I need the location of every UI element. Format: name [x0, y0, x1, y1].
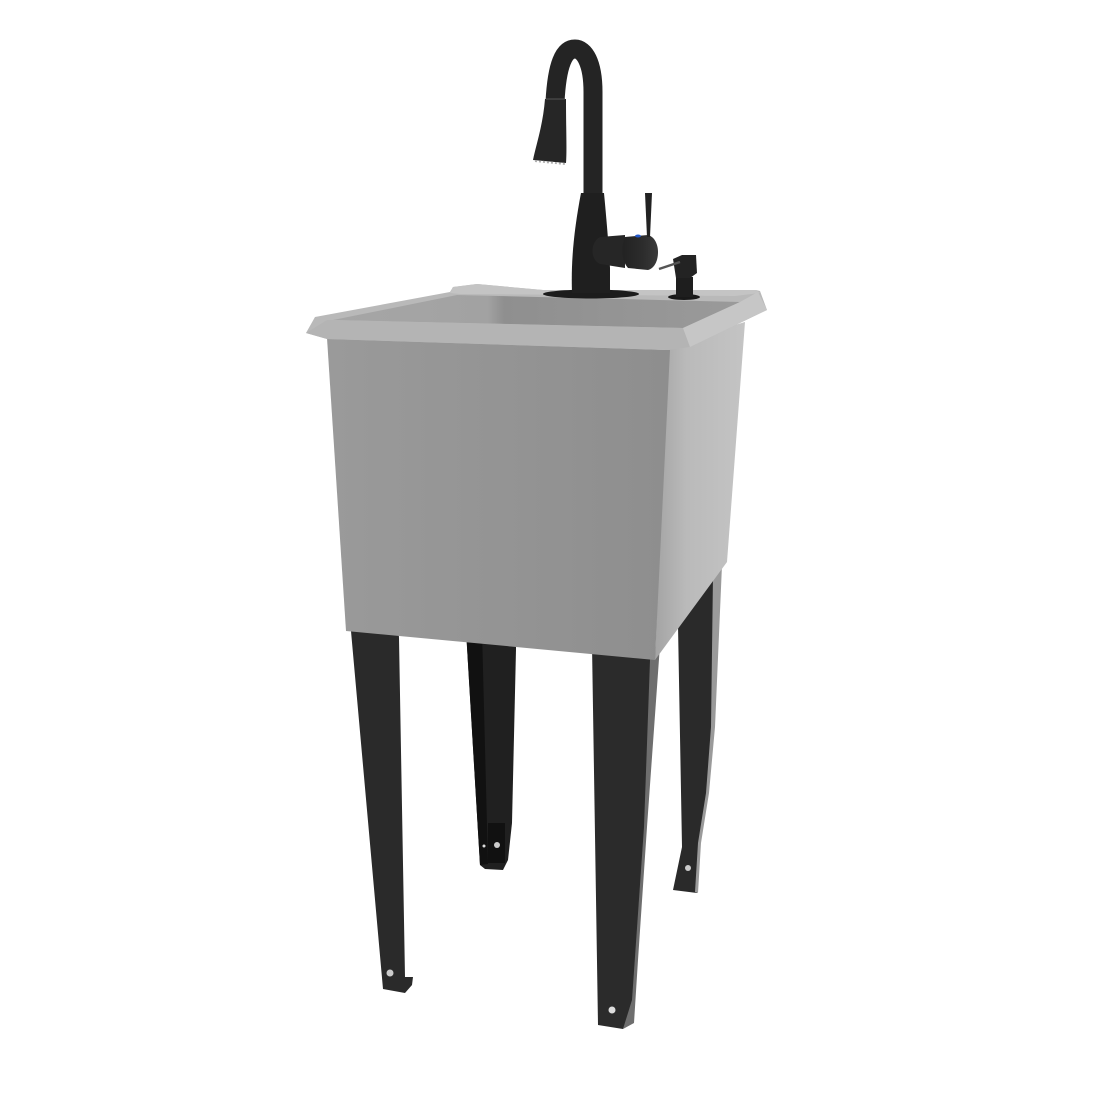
- rim: [306, 284, 767, 350]
- faucet body: [572, 193, 610, 293]
- tub side face: [655, 322, 745, 660]
- tub front face: [327, 338, 670, 660]
- tub: [306, 284, 767, 660]
- head: [673, 255, 697, 278]
- blue indicator: [635, 234, 641, 238]
- base: [668, 294, 700, 300]
- faucet: [533, 49, 658, 298]
- rear right leg: [673, 565, 722, 893]
- stem: [676, 277, 693, 297]
- spray nozzles: [535, 161, 565, 164]
- deck plate: [543, 290, 639, 298]
- pull-down spray head: [533, 99, 566, 163]
- rear left leg: [466, 630, 516, 870]
- rim front edge: [306, 320, 690, 350]
- rim corner highlight: [683, 292, 767, 347]
- spray head seam: [546, 98, 565, 100]
- gooseneck: [555, 49, 593, 195]
- basin: [333, 295, 740, 328]
- front right leg: [592, 645, 660, 1029]
- front left leg: [350, 620, 413, 993]
- lever: [645, 193, 652, 237]
- rim back highlight: [450, 284, 760, 296]
- handle cylinder: [622, 235, 658, 270]
- spout: [659, 262, 680, 269]
- handle housing: [592, 235, 625, 268]
- soap dispenser: [659, 255, 700, 300]
